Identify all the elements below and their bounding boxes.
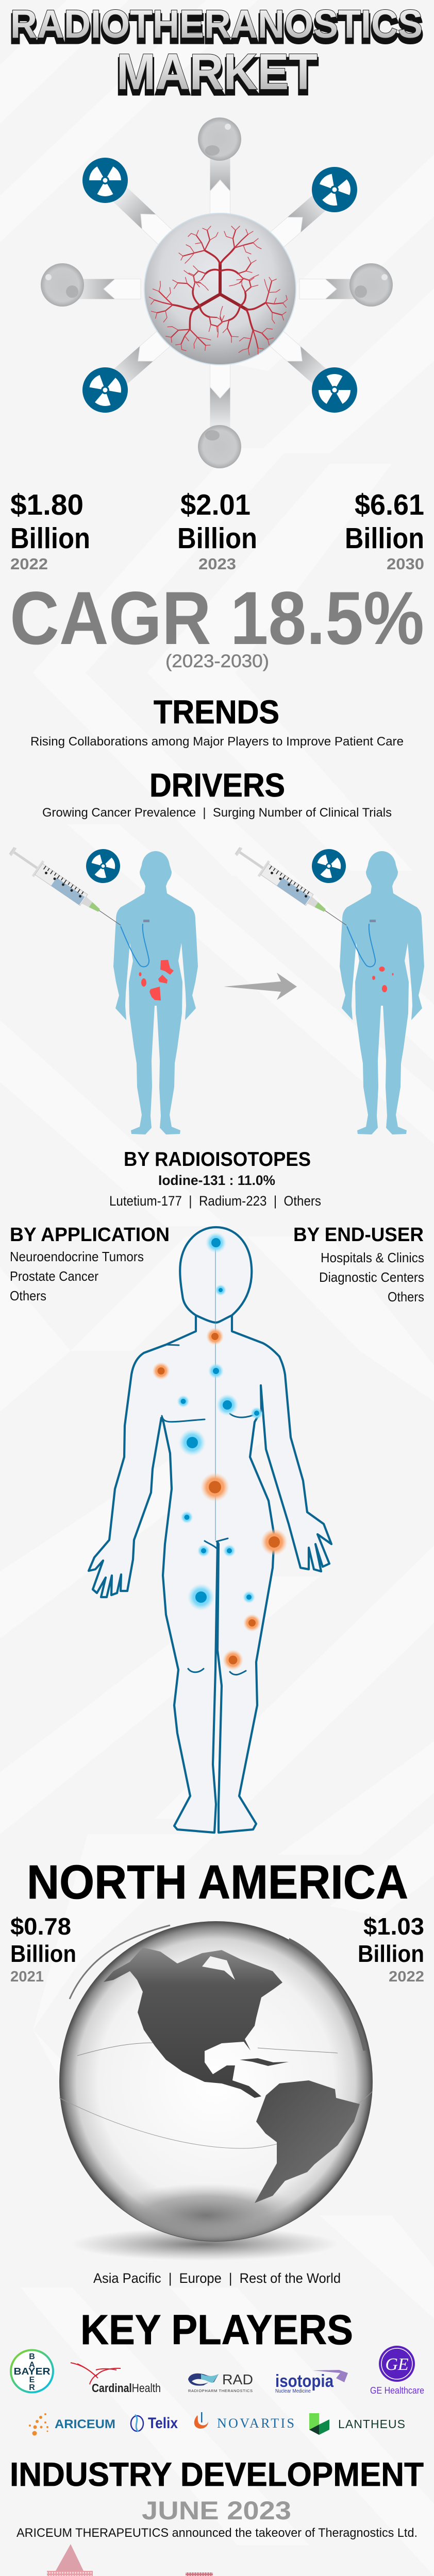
key players heading: KEY PLAYERS [80, 2307, 353, 2353]
regional value 2021 [10, 1913, 76, 1985]
logo: isotopia: Nuclear Medicine [275, 2388, 311, 2394]
industry development [10, 2455, 424, 2540]
by application: Prostate Cancer [10, 1268, 98, 1284]
stat 2030: Billion [345, 522, 424, 555]
orange spots [153, 1328, 288, 1670]
logo: GE Healthcare: GE Healthcare [370, 2385, 424, 2396]
stat 2023: 2023 [198, 555, 236, 573]
CAGR: (2023-2030) [165, 651, 269, 671]
stat 2022 [10, 488, 90, 573]
stat 2030: $6.61 [355, 488, 424, 521]
logo: isotopia: isotopia [275, 2371, 334, 2391]
logo: Bayer: BAYER [13, 2366, 51, 2377]
logo: Telix: Telix [148, 2415, 178, 2432]
title [10, 2, 423, 105]
logo: GE Healthcare: GE [385, 2355, 409, 2374]
regional value 2022: Billion [358, 1940, 424, 1967]
logo: RAD [188, 2371, 253, 2393]
logo: GE Healthcare [370, 2346, 424, 2396]
central sphere with blood vessels [141, 213, 299, 365]
regional value 2021: Billion [10, 1940, 76, 1967]
title: MARKET [116, 48, 318, 105]
by end-user: Hospitals & Clinics [321, 1250, 424, 1265]
glass globe [59, 1921, 373, 2261]
icon: radiation lower left [73, 358, 137, 422]
by radioisotopes: Iodine-131 : 11.0% [158, 1173, 275, 1188]
development note: ARICEUM THERAPEUTICS announced the takeover of Theragnostics Ltd. [16, 2526, 418, 2540]
logo: Lantheus: LANTHEUS [338, 2417, 405, 2431]
by radioisotopes: BY RADIOISOTOPES [124, 1148, 311, 1171]
regional value 2022: $1.03 [363, 1913, 424, 1940]
hero diagram: sphere with arrows [41, 117, 393, 468]
trends: TRENDS [154, 693, 279, 731]
other regions: Asia Pacific | Europe | Rest of the World [93, 2270, 341, 2286]
body after treatment [233, 843, 424, 1134]
icon: glass ball right [349, 263, 393, 307]
stat 2023: Billion [177, 522, 257, 555]
south america landmass [255, 2080, 360, 2203]
stat 2023 [177, 488, 257, 573]
arrow: before to after [224, 973, 297, 1000]
logo: Bayer [11, 2350, 53, 2393]
regional value 2022 [358, 1913, 424, 1985]
logo: Novartis: NOVARTIS [217, 2416, 294, 2431]
icon: glass ball top [198, 117, 241, 161]
body outline with spots [89, 1227, 331, 1833]
by application [10, 1224, 170, 1303]
stat 2030 [345, 488, 424, 573]
by application: BY APPLICATION [10, 1224, 170, 1246]
by radioisotopes [109, 1148, 321, 1209]
by application: Neuroendocrine Tumors [10, 1249, 144, 1264]
market size stats [10, 488, 424, 573]
logo: Bayer: R [29, 2383, 35, 2392]
by application: Others [10, 1288, 46, 1303]
stat 2022: $1.80 [10, 488, 84, 521]
drivers: DRIVERS [149, 767, 285, 804]
regional value 2021: 2021 [10, 1969, 44, 1985]
logo: RAD: RADIOPHARM THERANOSTICS [188, 2388, 253, 2393]
logo: Ariceum: ARICEUM [55, 2417, 115, 2431]
logo: Cardinal Health: CardinalHealth [92, 2381, 161, 2395]
icon: radiation lower right [312, 367, 357, 413]
body before treatment [7, 843, 198, 1134]
logo: RAD: RAD [222, 2371, 253, 2387]
by radioisotopes: Lutetium-177 | Radium-223 | Others [109, 1193, 321, 1209]
by end-user: Others [388, 1289, 424, 1304]
blue spots [177, 1232, 263, 1611]
logo: Telix [131, 2415, 178, 2432]
city skyline [0, 2544, 434, 2576]
treatment illustration [7, 843, 424, 1134]
logo: Bayer: A [29, 2361, 35, 2369]
stat 2023: $2.01 [180, 488, 251, 521]
date: JUNE 2023 [142, 2496, 291, 2525]
logo: Ariceum [29, 2413, 115, 2436]
regional value 2021: $0.78 [10, 1913, 71, 1940]
drivers [42, 767, 392, 820]
icon: radiation upper left [82, 158, 128, 203]
icon: radiation upper right [308, 163, 361, 216]
logo: Novartis [194, 2412, 294, 2431]
by end-user: BY END-USER [293, 1224, 424, 1246]
trends: Rising Collaborations among Major Players to Improve Patient Care [30, 735, 404, 749]
stat 2022: 2022 [10, 555, 48, 573]
logo: Lantheus [309, 2413, 405, 2435]
industry development: INDUSTRY DEVELOPMENT [10, 2455, 424, 2493]
trends [30, 693, 404, 749]
by end-user [293, 1224, 424, 1304]
regional value 2022: 2022 [389, 1969, 424, 1985]
icon: glass ball bottom [198, 425, 241, 468]
title: MARKET [116, 43, 318, 100]
logo: Cardinal Health [71, 2363, 161, 2395]
hudson bay [202, 1956, 235, 1980]
caribbean islands [240, 2058, 289, 2066]
stat 2030: 2030 [387, 555, 424, 573]
stat 2022: Billion [10, 522, 90, 555]
logo: Bayer: E [29, 2376, 35, 2384]
drivers: Growing Cancer Prevalence | Surging Number of Clinical Trials [42, 806, 392, 820]
key player logos [11, 2346, 424, 2436]
icon: glass ball left [41, 263, 84, 307]
north america heading: NORTH AMERICA [27, 1855, 408, 1909]
north america landmass [104, 1947, 282, 2098]
logo: Bayer: B [29, 2352, 35, 2361]
by end-user: Diagnostic Centers [319, 1269, 424, 1285]
